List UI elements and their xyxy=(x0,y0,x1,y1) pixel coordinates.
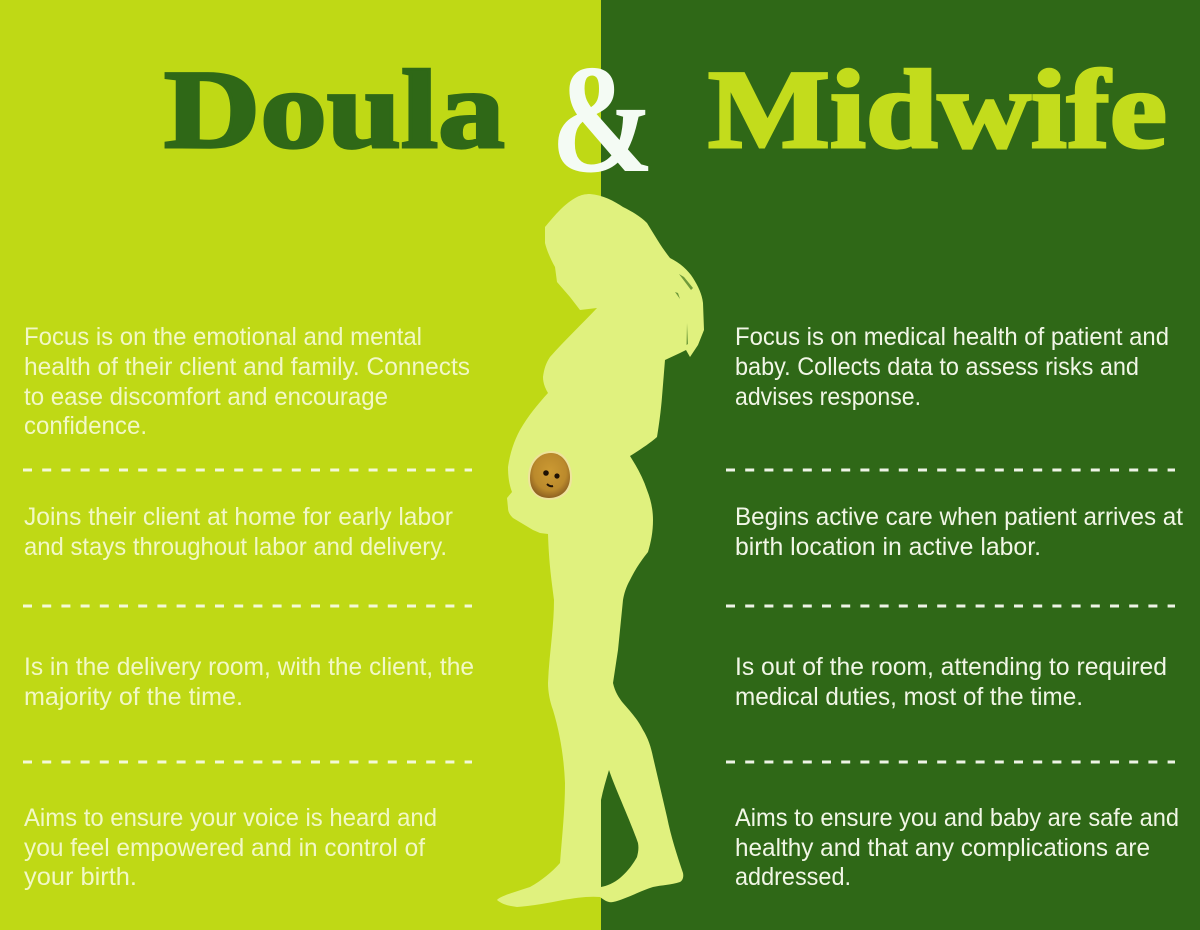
text: doula timing: Joins their client at home for early labor xyxy=(24,503,453,531)
text: midwife presence: medical duties, most of the time. xyxy=(735,683,1083,711)
text: doula timing: and stays throughout labor and delivery. xyxy=(24,533,447,561)
text: doula aim xyxy=(24,804,437,891)
text: doula focus xyxy=(24,323,470,440)
text: midwife timing xyxy=(735,503,1183,561)
title: Midwife: Midwife xyxy=(708,48,1167,172)
text: midwife aim: Aims to ensure you and baby are safe and xyxy=(735,804,1179,832)
text: doula focus: health of their client and family. Connects xyxy=(24,353,470,381)
title: ampersand: & xyxy=(551,34,654,205)
gap between legs xyxy=(601,770,638,887)
text: doula presence xyxy=(24,653,474,711)
text: midwife aim: healthy and that any complications are xyxy=(735,834,1150,862)
text: midwife presence: Is out of the room, attending to required xyxy=(735,653,1167,681)
text: midwife aim xyxy=(735,804,1179,891)
illustration: pregnant woman silhouette xyxy=(497,194,704,907)
text: doula focus: Focus is on the emotional and mental xyxy=(24,323,422,351)
text: doula focus: confidence. xyxy=(24,412,147,440)
text: midwife focus xyxy=(735,323,1169,411)
panel: doula background xyxy=(0,0,601,930)
text: doula aim: your birth. xyxy=(24,863,137,891)
text: midwife focus: advises response. xyxy=(735,383,921,411)
text: doula aim: Aims to ensure your voice is heard and xyxy=(24,804,437,832)
hair strands xyxy=(675,274,693,345)
text: midwife presence xyxy=(735,653,1167,711)
text: doula focus: to ease discomfort and encourage xyxy=(24,383,388,411)
panel: midwife background xyxy=(601,0,1200,930)
text: doula presence: majority of the time. xyxy=(24,683,243,711)
text: doula aim: you feel empowered and in control of xyxy=(24,834,425,862)
text: midwife timing: birth location in active labor. xyxy=(735,533,1041,561)
text: midwife focus: Focus is on medical health of patient and xyxy=(735,323,1169,351)
text: midwife timing: Begins active care when patient arrives at xyxy=(735,503,1183,531)
dashed dividers xyxy=(23,470,1175,762)
text: midwife focus: baby. Collects data to assess risks and xyxy=(735,353,1139,381)
text: doula presence: Is in the delivery room, with the client, the xyxy=(24,653,474,681)
text: doula timing xyxy=(24,503,453,561)
text: midwife aim: addressed. xyxy=(735,863,851,891)
icon: smiling bean baby xyxy=(528,451,572,500)
title: Doula: Doula xyxy=(164,47,505,172)
